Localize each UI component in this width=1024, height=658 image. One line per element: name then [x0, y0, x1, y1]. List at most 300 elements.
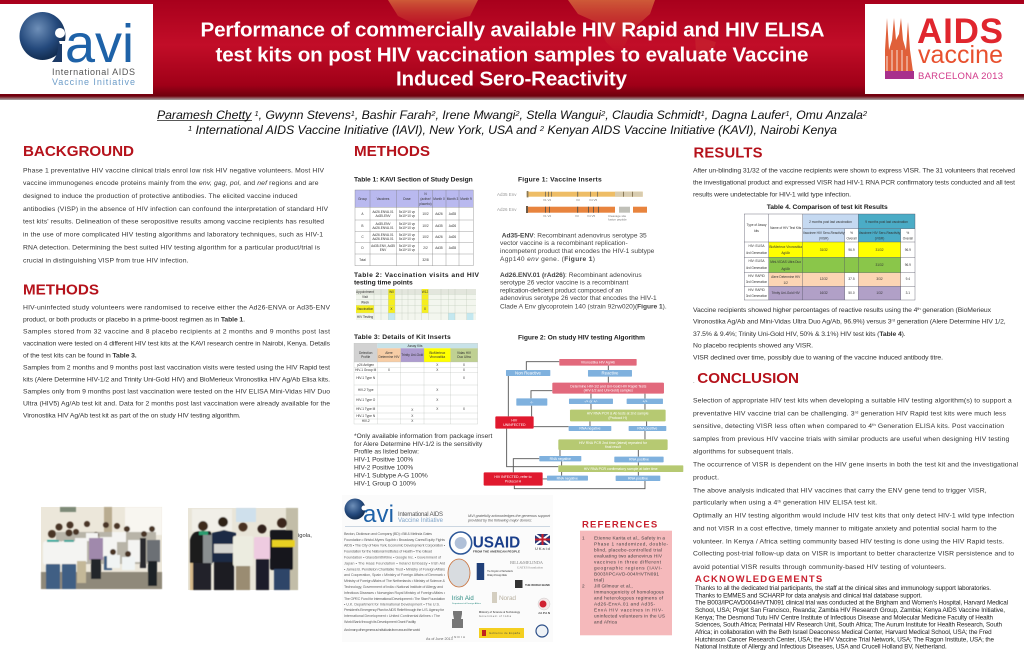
table 3: kit inserts: HIV-1 Type N [356, 414, 376, 418]
logo: IAVI [0, 4, 153, 94]
panel: methods left [23, 282, 331, 419]
figure 1: vaccine inserts diagram: Ad26 Env [497, 207, 517, 212]
text: acknowledgements body [695, 585, 1008, 651]
table 1: study design: Group [358, 197, 367, 201]
logo: Bill and Melinda Gates Foundation: BILL&MELINDA [510, 560, 544, 565]
references box: Immunogenicity of homologous [594, 590, 665, 594]
figure 2: HIV testing algorithm flowchart: Protocol H [505, 479, 522, 483]
text: methods body: vaccination were tested on 4 different HIV test kits at the KAVI research centre in Nairobi, Kenya. Details [23, 340, 331, 348]
figure 2: HIV testing algorithm flowchart: Determine HIV-1/2 and Uni-Gold HIV Rapid Tests [570, 384, 647, 388]
figure 1: vaccine inserts diagram: V4 V5 [589, 198, 598, 202]
table 1: study design: Ad35-ENV [375, 214, 391, 218]
heading: background: BACKGROUND [23, 143, 134, 160]
authors and affiliations: 1 [255, 109, 259, 118]
text: donor list: Technology, Government of India • National Institute of Allergy and [344, 585, 443, 589]
text: conclusion body: The occurrence of VISR is dependent on the HIV gene inserts in both the test kit and the investigational [693, 461, 1018, 468]
text: conclusion body: Optimally an HIV testing algorithm would include HIV test kits that only detect HIV-1 wild type infection [693, 512, 1014, 519]
table 1: study design: Ad35-ENV, Ad35 [371, 244, 395, 248]
figure 2: HIV testing algorithm flowchart: Reactive [602, 371, 619, 376]
text: Ad26.ENV.01 description: serotype 26 vector vaccine is a recombinant [500, 280, 628, 286]
authors and affiliations: 2 [600, 109, 606, 118]
text: donor list: Japan • The Haas Foundation • Ireland Embassy • Irish Aid [344, 562, 445, 566]
table 1: study design: Ad26 [435, 212, 443, 216]
text: results findings [693, 306, 1006, 361]
table 3: kit inserts: HIV-1 Type O [356, 398, 376, 402]
text: donor acknowledgement: IAVI gratefully acknowledges the generous support [468, 514, 551, 518]
logo: Irish Aid: Department of Foreign Affairs [452, 602, 482, 605]
text: conclusion body: avoid potential VISR results through community-based HIV testing of volunteers. [693, 564, 946, 571]
table 3: kit inserts: X [436, 398, 439, 402]
table 3: kit inserts: X [411, 419, 414, 423]
logo: Spain ministry: Gobierno de España [489, 631, 520, 635]
figure 1: vaccine inserts diagram: Ad35 Env [497, 192, 517, 197]
text: conclusion body: generation HIV ELISA test kit. [781, 500, 877, 507]
table 4: comparison of test kit results: 3/32 [876, 277, 883, 281]
table 4: comparison of test kit results: 31/32 [820, 248, 828, 252]
figure 1: vaccine inserts diagram: V4 V5 [587, 214, 596, 218]
authors and affiliations: 2 [539, 124, 545, 133]
text: table 3 footnote: HIV-1 Group O 100% [354, 480, 416, 487]
logo: Ministry of Science India text [479, 611, 521, 618]
panel: acknowledgements [695, 574, 1008, 651]
text: donor list: Infectious Diseases • Norwegian Royal Ministry of Foreign Affairs • [344, 591, 446, 595]
table 1: study design: 10/2 [422, 224, 429, 228]
text: methods body: Samples stored from 32 vaccine and 8 placebo recipients at 2 months and 9 months post last [23, 328, 330, 336]
figure 1: vaccine inserts diagram: V3 [576, 198, 580, 202]
table 3: kit inserts: Duo Ultra [457, 355, 471, 359]
table 3: kit inserts: X [463, 368, 466, 372]
authors and affiliations: 1 [188, 124, 192, 133]
logo: IAVI: International AIDS [52, 67, 135, 77]
table 4: comparison of test kit results: 3rd Generation [746, 280, 767, 284]
text: results intro: results were undetectable for HIV-1 wild type infection. [693, 192, 851, 199]
logo: Irish Aid [452, 596, 482, 605]
table 4: comparison of test kit results: % [906, 231, 909, 235]
table 4: comparison of test kit results: 9.4 [906, 277, 910, 281]
text: table 3 footnote: *Only available information from package insert [354, 433, 492, 440]
table 1: study design: placebo) [419, 202, 432, 206]
text: conclusion body: sensitive, detecting VISR less often when compared to 4 [693, 423, 872, 430]
table 2: vaccination visits: X [390, 307, 393, 311]
table 2: vaccination visits: W0 [389, 290, 394, 294]
heading: results: RESULTS [694, 145, 763, 161]
table 4: comparison of test kit results: Vaccinee HIV Sero-Reactivity [803, 231, 845, 235]
figure 1: vaccine inserts diagram: fusion peptide [608, 218, 627, 222]
text: conclusion body [693, 397, 1018, 571]
table 3: kit inserts: Vidas HIV [457, 351, 472, 355]
table 2: vaccination visits: Appointment [356, 290, 374, 294]
table 4: comparison of test kit results: 31/32 [876, 248, 884, 252]
table 4: comparison of test kit results: Alere Determine HIV [771, 275, 801, 279]
logo: round seal [536, 625, 548, 637]
heading: table 2 [354, 272, 480, 286]
table 1: study design: 5x10^10 vp [399, 210, 415, 214]
figure 2: HIV testing algorithm flowchart: -/- [530, 400, 533, 404]
text: donor list: The OPEC Fund for International Development • The Starr Foundation [344, 597, 445, 601]
text: methods body: Samples from 2 months and 9 months post last vaccination visits were tested using the HIV Rapid test [23, 364, 330, 371]
text: conclusion body: generation HIV Rapid test kits were much less [859, 410, 1007, 417]
figure 2: HIV testing algorithm flowchart: RNA positive [628, 477, 648, 481]
text: background body: designed to induce the production of protective antibodies. The elicited vaccine induced [23, 193, 298, 200]
photo: study team group [41, 507, 162, 589]
text: donor list: Ministry of Foreign Affairs of The Netherlands • Ministry of Science & [344, 579, 446, 583]
table 2: vaccination visits: X [424, 307, 427, 311]
table 1: study design: Total [359, 258, 366, 262]
text: conclusion body: th [872, 422, 876, 427]
table 4: comparison of test kit results: 96.9 [905, 263, 911, 267]
table 1: study design: Month 9 [460, 197, 472, 201]
text: background body [23, 167, 328, 264]
table 1: study design: 5x10^10 vp [399, 222, 415, 226]
table 1: study design: Ad26.ENVA.01 [372, 210, 394, 214]
table 4: comparison of test kit results: (VISR) [819, 236, 828, 240]
references box: Ad26-EnvA.01 and Ad35- [594, 602, 655, 606]
text: results findings: Vaccine recipients showed higher percentages of reactive results using the 4 [693, 307, 917, 314]
panel: IAVI donors [342, 495, 553, 642]
logo: IAVI small: avi [363, 501, 394, 528]
table 3: kit inserts: Vironostika [429, 355, 445, 359]
text: results findings: No placebo recipients showed any VISR. [693, 342, 813, 349]
figure 2: HIV testing algorithm flowchart: RNA negative [557, 476, 578, 480]
panel: methods centre column [354, 143, 683, 489]
text: background body: test kits' results. Delineation of these seropositive results among vaccine recipients has resulted [23, 219, 324, 226]
logo: IAVI small [344, 498, 444, 528]
references box: Phase 1 randomized, double- [594, 542, 668, 546]
table 1: study design: N [424, 192, 427, 196]
references box: evaluating two adenovirus HIV [594, 554, 663, 558]
panel: references [580, 520, 672, 635]
figure 1: vaccine inserts diagram [497, 191, 647, 222]
logo: USAID: FROM THE AMERICAN PEOPLE [473, 550, 520, 554]
table 4: comparison of test kit results: HIV: RAPID [748, 274, 766, 278]
text: acknowledgements body: Hutchinson Cancer Research Center, USA; the HIV Vaccine Trial Network, USA; The Ragon Institute, USA; the [695, 636, 994, 643]
table 3: kit inserts: X [436, 363, 439, 367]
table 1: study design: 5x10^10 vp [399, 244, 415, 248]
table 1: study design: Ad26.ENVA.01 [372, 233, 394, 237]
text: table 3 footnote [354, 433, 492, 487]
table 4: comparison of test kit results: Overall [846, 236, 857, 240]
text: background body: antibodies (VISP) in the absence of HIV infection can confound the interpretation of standard HIV [23, 206, 328, 213]
text: background body: crucial in distinguishing VISP from true HIV infection. [23, 257, 189, 264]
table 4: comparison of test kit results: Ag/Ab [781, 267, 790, 271]
table 4: comparison of test kit results: 96.9 [848, 248, 855, 252]
references box: and heterologous regimens of [594, 596, 664, 600]
figure 2: HIV testing algorithm flowchart: HIV RNA PCR & Ab tests at 2nd sample [587, 411, 649, 415]
text: donor acknowledgement [467, 514, 551, 522]
table 1: study design: 2/2 [423, 246, 428, 250]
table 4: comparison of test kit results: Vaccinee HIV Sero-Reactivity [859, 231, 901, 235]
figure 1: vaccine inserts diagram: V3 [575, 214, 579, 218]
figure 2: HIV testing algorithm flowchart: HIV RNA PCR confirmatory sample at later time [584, 467, 658, 471]
table 1: study design: ENV [380, 248, 387, 252]
text: donor list [344, 532, 453, 641]
table 4: comparison of test kit results: 16/32 [820, 291, 828, 295]
figure 2: HIV testing algorithm flowchart: (Protocol H) [608, 416, 627, 420]
text: results intro [693, 168, 1015, 199]
header band [0, 0, 1024, 100]
table 1: study design: Ad26 [435, 235, 443, 239]
table 1: study design: C [361, 235, 364, 239]
table 3: kit inserts: Assay Kits [408, 344, 423, 348]
figure 2: HIV testing algorithm flowchart: RNA positive [629, 458, 649, 462]
text: donor list: World Bank through its Development Grant Facility [344, 620, 416, 624]
authors and affiliations: 2 [514, 109, 520, 118]
table 4: comparison of test kit results: 31/32 [876, 263, 884, 267]
table 1: study design: 10/2 [422, 212, 429, 216]
logo: Ministry of Science India text: Ministry of Science & Technology [479, 611, 521, 614]
text: conclusion body: Selection of appropriate HIV test kits when developing a suitable HIV testing algorithm(s) to support a [693, 397, 1012, 404]
table 3: kit inserts: HIV-1 Type M [356, 407, 376, 411]
text: acknowledgements body: National Institute of Allergy and Infectious Diseases, USA and Crucell Holland BV, Netherland. [695, 644, 947, 651]
text: donor list: Foundation for the National Institutes of Health • The Gilead [344, 550, 432, 554]
authors and affiliations: , Gwynn Stevens [259, 108, 351, 122]
text: clipped caption fragment: igola, [298, 533, 312, 539]
text: results intro: the investigational product and expressed VISR had HIV-1 RNA PCR confirmatory tests conducted and all test [693, 179, 1015, 186]
text: conclusion body: preventative HIV vaccine trial can be challenging. 3 [693, 410, 855, 417]
table 4: comparison of test kit results: 1/32 [876, 291, 883, 295]
authors and affiliations: Paramesh Chetty [157, 108, 251, 122]
authors and affiliations: , Omu Anzala [789, 108, 863, 122]
table 4: comparison of test kit results: Ag/Ab [781, 251, 790, 255]
text: conclusion body: algorithms for subsequent trials. [693, 448, 793, 455]
logo: India emblem: INDIA [452, 635, 465, 639]
text: Ad26.ENV.01 description [500, 272, 667, 310]
table 1: study design: Ad35-ENV [375, 222, 391, 226]
figure 1: vaccine inserts diagram: V1 V2 [543, 198, 552, 202]
table 1: study design: B [361, 224, 364, 228]
table 3: kit inserts: Detection [359, 351, 373, 355]
table 4: comparison of test kit results: kits [754, 229, 759, 233]
text: acknowledgements body: Africa; in collaboration with the Beth Israel Deaconess Medical Center, Harvard Medical School, USA; the Fred [695, 629, 992, 636]
table 1: study design: Dose [403, 197, 411, 201]
table 4: comparison of test kit results: 3.1 [906, 291, 910, 295]
table 4: comparison of test kit results: 1/2 [783, 281, 788, 285]
text: conclusion body: Collecting post-trial follow-up data on VISR is important to better characterize VISR persistence and to [693, 551, 1014, 558]
text: donor list: Foundation • Bristol-Myers Squibb • Broadway Cares/Equity Fights [344, 538, 445, 542]
table 1: study design [355, 190, 473, 266]
table 4: comparison of test kit results: 37.5 [848, 277, 855, 281]
text: conclusion body: particularly when using a 4 [693, 500, 777, 507]
figure 2: HIV testing algorithm flowchart: RNA negative [550, 457, 571, 461]
figure 2: HIV testing algorithm flowchart: RNA positive [637, 427, 657, 431]
figure 2: HIV testing algorithm flowchart: -/+ or +/- [584, 400, 598, 404]
heading: references: REFERENCES [582, 520, 658, 530]
references box [580, 531, 672, 635]
figure 2: HIV testing algorithm flowchart: (HIV-1/2 and Uni-Gold) samples [584, 389, 633, 393]
table 4: comparison of test kit results: 4rd Generation [746, 251, 767, 255]
table 3: kit inserts: X [463, 407, 466, 411]
text: Ad35-ENV description [500, 232, 655, 263]
text: conclusion body: volunteer. In Kenya / Africa setting community based HIV testing is done using the HIV Rapid tests. [693, 538, 1004, 545]
text: donor list: As of June 2013 [426, 637, 453, 641]
table 4: comparison of test kit results: Overall [903, 236, 913, 240]
table 3: kit inserts: Trinity Uni-Gold [401, 353, 424, 357]
table 1: study design: 10/2 [422, 235, 429, 239]
table 1: study design: Ad26.ENVA.01 [372, 237, 394, 241]
table 1: study design: 5x10^10 vp [399, 233, 415, 237]
figure 2: HIV testing algorithm flowchart: Vironostika HIV Ag/Ab [581, 361, 615, 365]
table 4: comparison of test kit results: Mini-VIDAS Ultra Duo [770, 260, 801, 264]
table 4: comparison of test kit results: (VISR) [875, 236, 884, 240]
table 3: kit inserts: X [388, 368, 391, 372]
table 2: vaccination visits: Week [361, 300, 369, 304]
table 1: study design: A [361, 212, 364, 216]
table 3: kit inserts: X [436, 407, 439, 411]
text: table 3 footnote: HIV-2 Positive 100% [354, 465, 413, 472]
authors and affiliations: International AIDS Vaccine Initiative (IAVI), New York, USA and [192, 123, 540, 137]
references box: 2 [582, 584, 585, 588]
references box: uninfected volunteers in the US [594, 614, 665, 618]
text: Ad26.ENV.01 description: Ad26.ENV.01 (rAd26): Recombinant adenovirus [500, 272, 642, 279]
text: methods body: Ultra (HIV5) Ag/Ab test kit and. Data for 2 months post last vaccination were already available for the [23, 400, 330, 407]
text: Ad26.ENV.01 description: adenovirus serotype 26 vector that encodes the HIV-1 [500, 295, 657, 302]
figure 2: HIV testing algorithm flowchart: +/+ [642, 400, 647, 404]
table 1: study design: 5x10^10 vp [399, 226, 415, 230]
figure 2: HIV testing algorithm flowchart: final result [605, 445, 621, 449]
authors and affiliations: , Bashir Farah [355, 108, 432, 122]
text: methods body: HIV-uninfected study volunteers were randomised to receive either the Ad26-ENVA or Ad35-ENV [23, 305, 330, 312]
table 1: study design: Vaccines [377, 197, 390, 201]
authors and affiliations: 2 [862, 109, 868, 118]
text: acknowledgements body: The B003/IPCAVD004/HVTN091 clinical trial was conducted at the Brigham and Women's Hospital, Harvard Medical [695, 600, 1008, 607]
logo: USAID [450, 532, 520, 554]
table 4: comparison of test kit results: 96.9 [905, 248, 911, 252]
table 3: kit inserts: HIV-2 Type [358, 388, 374, 392]
logo: Bill and Melinda Gates Foundation [510, 560, 544, 570]
references box: blind, placebo-controlled trial [594, 548, 662, 552]
heading: figure 1: Figure 1: Vaccine Inserts [518, 176, 602, 184]
text: Ad26.ENV.01 description: replication-deficient product composed of an [500, 287, 623, 294]
table 3: kit inserts: HIV-1 Type N [356, 376, 376, 380]
table 3: kit inserts: Profile [361, 355, 370, 359]
table 4: comparison of test kit results: 3rd Generation [746, 294, 767, 298]
table 4: comparison of test kit results: Type of Assay [747, 223, 767, 227]
text: conclusion body: th [777, 499, 781, 504]
table 1: study design: D [361, 246, 364, 250]
text: donor list: President's Emergency Plan for AIDS Relief through the U.S. Agency for [344, 608, 445, 612]
logo: World Bank: THE WORLD BANK [525, 583, 551, 587]
text: table 3 footnote: for Alere Determine HIV-1/2 is the sensitivity [354, 441, 483, 448]
table 1: study design: 32/8 [422, 258, 429, 262]
logo: JICA [538, 598, 550, 615]
text: methods body: Vironostika HIV Ag/Ab test kit as part of the on study HIV testing algorithm. [23, 412, 241, 419]
table 1: study design: Ad26 [449, 224, 456, 228]
logo: IAVI small: International AIDS [398, 512, 443, 518]
text: donor list: Foundation • GlaxoSmithKline • Google Inc. • Government of [344, 556, 442, 560]
text: conclusion body: Generation ELISA kits. Post vaccination [876, 423, 1004, 430]
heading: table 2: testing time points [354, 280, 413, 286]
figure 2: HIV testing algorithm flowchart [484, 359, 683, 489]
text: donor list: And many other generous individuals from around the world [344, 628, 420, 632]
logo: IAVI small: Vaccine Initiative [398, 518, 444, 524]
table 1: study design: Ad35 [449, 246, 456, 250]
text: results findings: rd [892, 318, 895, 323]
text: acknowledgements body: Sciences, South Africa; Perinatal HIV Research Unit, South Africa; The Aurum Institute for Health Research, South [695, 622, 1002, 629]
authors and affiliations: 2 [430, 109, 436, 118]
heading: table 4: Table 4. Comparison of test kit Results [767, 204, 888, 211]
table 4: comparison of test kit results [744, 214, 915, 300]
table 4: comparison of test kit results: 2 months post last vaccination [809, 220, 852, 224]
table 2: vaccination visits [356, 289, 476, 320]
heading: conclusion: CONCLUSION [697, 370, 799, 387]
table 2: vaccination visits: Vaccination [357, 307, 373, 311]
table 3: kit inserts: Alere [385, 351, 393, 355]
text: donor acknowledgement: provided by the following major donors: [467, 518, 532, 522]
figure 2: HIV testing algorithm flowchart: HIV RNA PCR 2nd time (latest) repeated for [579, 441, 648, 445]
table 1: study design: Ad26.ENVA.01 [372, 226, 394, 230]
logo: Netherlands ministry: Ministry of Foreign Affairs [487, 574, 508, 577]
logo: IAVI: avi [65, 14, 134, 74]
logo: AIDS Vaccine Barcelona 2013: BARCELONA 2013 [918, 71, 1003, 82]
title: Induced Sero-Reactivity [396, 68, 628, 90]
text: donor list: • U.K. Department for International Development • The U.S. [344, 602, 440, 606]
heading: acknowledgements: ACKNOWLEDGEMENTS [695, 574, 823, 585]
logo: Irish Aid: Irish Aid [452, 596, 474, 602]
text: results findings: VISR declined over time, possibly due to waning of the vaccine induced antibody titre. [693, 354, 943, 361]
table 3: kit inserts: HIV-2 [362, 419, 370, 423]
text: methods body: kits (Alere Determine HIV-1/2 and Trinity Uni-Gold HIV) and BioMerieux Vironostika HIV Ag/Ab Elisa kits. [23, 376, 330, 383]
logo: India emblem [452, 611, 465, 639]
text: results findings: 37.5% & 9.4%; Trinity Uni-Gold HIV, 50% & 3.1%) HIV test kits (Table 4). [693, 331, 906, 338]
table 4: comparison of test kit results: % [850, 231, 853, 235]
table 3: kit inserts: Determine HIV [379, 355, 400, 359]
text: methods body [23, 305, 331, 419]
text: Ad35-ENV description: Agp140 env gene. (Figure 1) [500, 256, 595, 263]
text: acknowledgements body: Thanks to all the dedicated trial participants, the staff at the clinical sites and immunology support laboratories. [695, 585, 991, 592]
figure 2: HIV testing algorithm flowchart: RNA negative [579, 427, 601, 431]
references box: EnvA HIV vaccines in HIV- [594, 608, 663, 612]
text: donor list: AIDS • The City of New York, Economic Development Corporation • [344, 544, 446, 548]
table 4: comparison of test kit results: 50.0 [848, 291, 855, 295]
table 3: kit inserts: X [411, 408, 414, 412]
text: donor list: • James B. Pendleton Charitable Trust • Ministry of Foreign Affairs [344, 568, 445, 572]
table 3: kit inserts [354, 343, 478, 424]
logo: AIDS Vaccine Barcelona 2013: vaccine [918, 41, 1003, 69]
text: acknowledgements body: Kenya; The Desmond Tutu HIV Centre Institute of Infectious Disease and Molecular Medicine Faculty of Health [695, 614, 993, 621]
authors and affiliations: , Irene Mwangi [435, 108, 517, 122]
references box: Etienne Karita et al., Safety in a [594, 536, 665, 540]
references box: geographic regions (IAVI- [594, 566, 662, 570]
table 3: kit inserts: X [463, 363, 466, 367]
text: conclusion body: rd [855, 409, 858, 414]
text: Ad35-ENV description: incompetent product that encodes the HIV-1 subtype [500, 248, 655, 255]
table 1: study design: (active/ [420, 197, 431, 201]
panel: results [693, 145, 1015, 361]
table 3: kit inserts: X [436, 388, 439, 392]
table 3: kit inserts: HIV-1 Group M [355, 368, 377, 372]
table 1: study design: Month 0 [433, 197, 445, 201]
table 1: study design: Ad35 [435, 224, 443, 228]
text: conclusion body: samples from previous HIV vaccine trials with similar products are useful when designing HIV testing [693, 436, 1010, 443]
title: Performance of commercially available HIV Rapid and HIV ELISA [200, 18, 825, 42]
table 4: comparison of test kit results: 9 months post last vaccination [865, 220, 908, 224]
figure 2: HIV testing algorithm flowchart: Non Reactive [515, 370, 542, 375]
text: background body: RNA detection. Determining the best suited HIV testing algorithm for a particular product/trial is [23, 244, 321, 251]
table 2: vaccination visits: Visit [362, 295, 368, 299]
text: table 3 footnote: HIV-1 Subtype A-G 100% [354, 472, 428, 479]
logo: AIDS Vaccine Barcelona 2013 [865, 4, 1024, 94]
table 3: kit inserts: X [436, 368, 439, 372]
logo: UK aid: UKaid [535, 546, 551, 551]
table 4: comparison of test kit results: Name of HIV Test Kits [770, 226, 802, 230]
logo: Netherlands ministry [477, 563, 514, 580]
logo: IAVI: Vaccine Initiative [52, 77, 135, 87]
text: table 3 footnote: HIV-1 Positive 100% [354, 456, 413, 463]
title [200, 18, 825, 90]
text: acknowledgements body: School, USA; Projet San Francisco, Rwanda; Zambia HIV Research Group, Zambia; Kenya AIDS Vaccine Initiative, [695, 607, 1005, 614]
table 1: study design: Ad35 [449, 212, 456, 216]
references box: vaccines in three different [594, 560, 662, 564]
